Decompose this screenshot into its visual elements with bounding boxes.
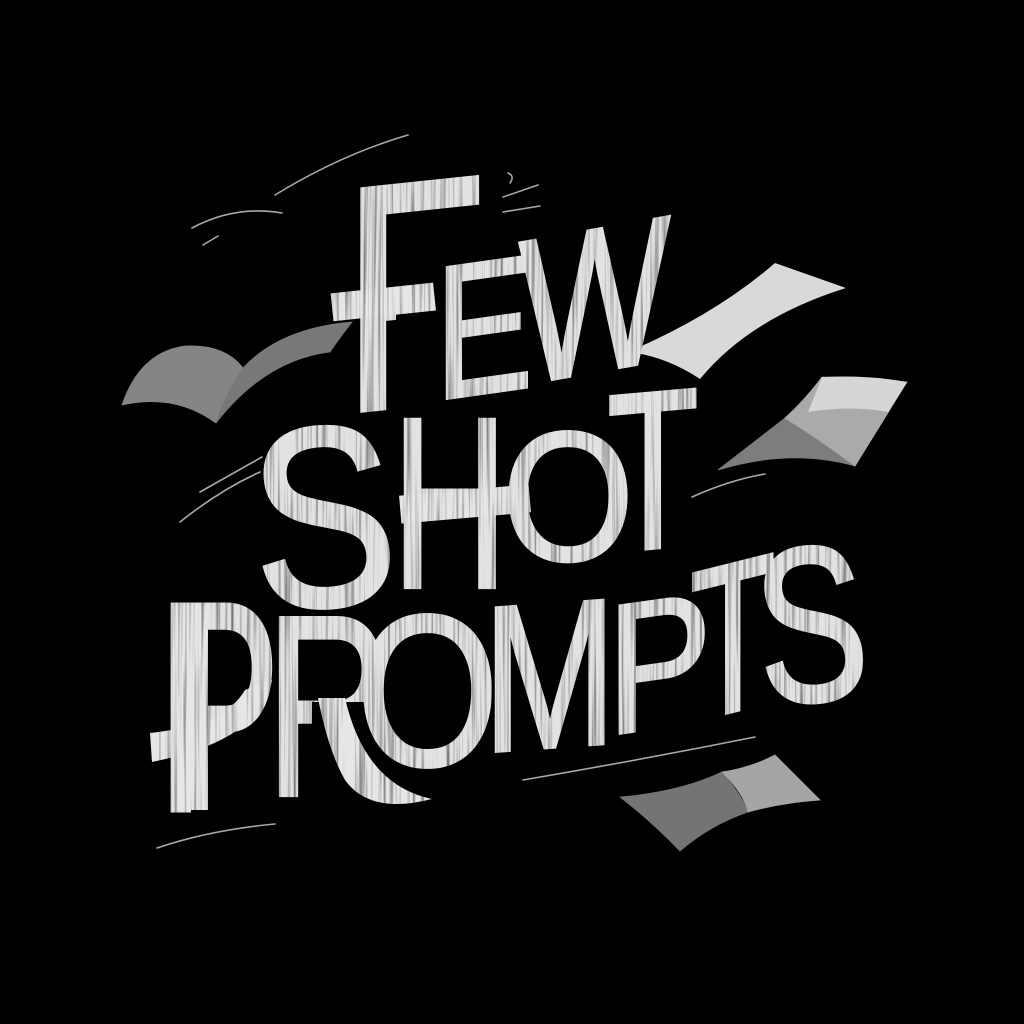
word: FEW: F <box>343 107 487 480</box>
word: FEW: W <box>519 173 670 429</box>
motion lines <box>157 135 765 848</box>
icon: flying paper, left <box>122 322 352 423</box>
word: SHOT: S <box>242 370 405 664</box>
word: PROMPTS: R <box>266 562 392 850</box>
word: FEW <box>330 174 672 413</box>
word: SHOT <box>242 341 699 664</box>
word: SHOT: H <box>392 367 508 639</box>
word: PROMPTS: S <box>746 498 877 752</box>
word: PROMPTS: T <box>690 507 776 768</box>
word: PROMPTS: P <box>607 553 712 775</box>
word: SHOT: T <box>607 341 699 600</box>
icon: flying paper, right <box>718 377 907 470</box>
icon: flying paper, bottom <box>620 755 820 851</box>
icon: flying paper, top right <box>628 263 846 379</box>
word: FEW: E <box>435 216 533 441</box>
title <box>150 174 864 812</box>
word: SHOT: O <box>502 394 634 599</box>
word: PROMPTS <box>150 544 864 812</box>
word: PROMPTS: O <box>356 572 499 811</box>
word: PROMPTS: P <box>157 540 280 874</box>
word: PROMPTS: M <box>483 556 616 797</box>
